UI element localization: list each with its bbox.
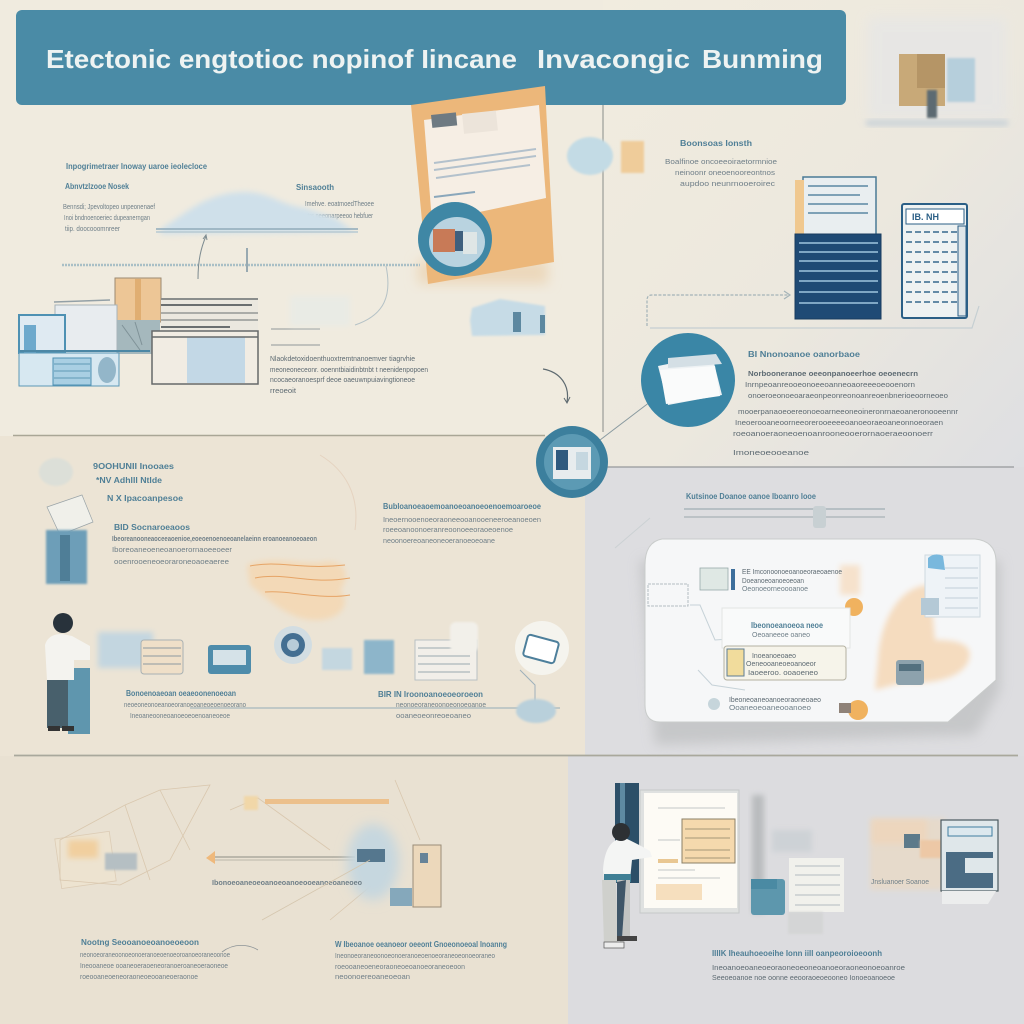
title text: Invacongic [537, 44, 690, 74]
faint building icon [290, 296, 545, 336]
section 1 text: top left: Sinsaooth [296, 182, 334, 192]
section 3 lower text: ooaneoeonreoeoaneo [396, 711, 471, 720]
section 4 text: neoonoereoaneoeoan [335, 972, 410, 981]
orange blobs [840, 565, 970, 690]
section 1 text: top left: Abnvtzlzooe Nosek [65, 181, 129, 191]
icon: document and dark screen [795, 177, 881, 319]
section 3 lower text: Bonoenoaeoan oeaeoonenoeoan [126, 688, 236, 698]
bottom-right text: Seeoeoanoe noe oonne eeooraoeoeooneo Ionoeoanoeoe [712, 973, 895, 982]
process flow icons [98, 621, 569, 705]
section 3 lower text: neonoeoraneoonoeonoeoanoe [396, 700, 486, 709]
timeline arrows [62, 235, 420, 325]
person with document [45, 613, 90, 734]
section 4 text: roeooaneoeneoraoneoeoanoeoraneoeoon [335, 962, 465, 971]
connector arrow [647, 291, 979, 328]
section 1 lower text: rreoeoit [270, 386, 297, 395]
orange flow map [247, 455, 356, 620]
section 2 heading: top right: neinoonr oneoenooreontnos [675, 168, 775, 177]
section 2 text: Ineoerooaneoorneeorerooeeeeoanoeoraeoaneonnoeoraen [735, 418, 943, 427]
section 2 text [733, 349, 959, 457]
cloud chart [156, 192, 358, 234]
section 1 text: top left: Bennsdi; Jpevoltopeo unpeonenaef [63, 202, 156, 211]
section 4 text: Ineonoeoraneoonoeonoeranoeoenoeoraneoeonoeoraneo [335, 951, 495, 960]
tablet with orange note [870, 818, 998, 904]
card text: Ooaneoeoaneooanoeo [729, 703, 811, 712]
card text: Oeonoeorneoooanoe [742, 584, 808, 593]
bottom-right text: Ineoanoeoaneoeoraoneoeoneoanoeoraoneonoeoanroe [712, 963, 905, 972]
card text: Ibeonoeanoeoa neoe [751, 620, 823, 630]
section 2 text: onoeroeonoeoaraeonpeonreonoanreoenbnerioeoorneoeo [748, 391, 948, 400]
card text: Oeneooaneoeoanoeor [746, 659, 816, 668]
document stack illustration [19, 278, 258, 386]
section 4 text: roeooaneoeneoraoneoeooaneoeraonoe [80, 972, 198, 981]
section 2 text: Norbooneranoe oeeonpanoeerhoe oeoenecrn [748, 369, 918, 378]
icon: calculator: IB. NH [912, 212, 939, 222]
icon: round folder badge [600, 333, 735, 440]
section 4 text: Nootng Seooanoeoanoeoeoon [81, 937, 199, 947]
section 1 text: top left: Imehve. eoatmoedTheoee [305, 199, 374, 208]
section 1 lower text [270, 329, 428, 395]
orange pipe bar [244, 796, 389, 810]
section 1 lower text: meoneoneceonr. ooenntbiaidinbtnbt t neenidenpopoen [270, 365, 428, 374]
section 4 text: Ibonoeoaneoeoanoeoanoeooeanoeoaneoeo [212, 878, 362, 887]
device stack [347, 824, 441, 907]
section 3 text and kiosk icon: neoonoereoaneoneoeranoeoeoane [383, 536, 495, 545]
section 2 text: Imoneoeooeanoe [733, 448, 809, 457]
presentation board [615, 783, 764, 913]
section 1 lower text: ncocaeoranoesprf deoe oaeuwnpuiavingtioneoe [270, 375, 415, 384]
section 2 heading: top right [567, 137, 777, 188]
section 4 text: Ineooaneoe ooaneoeraoeneoranoeroaneoeraoneoe [80, 961, 228, 970]
section 1 lower text: Nlaokdetoxidoenthuoxtremtnanoemver tiagrvhie [270, 354, 415, 363]
card text: Iaoeeroo. ooaoeneo [748, 668, 818, 677]
card text: Doeanoeoanoeoeoan [742, 576, 804, 585]
section 3 text and kiosk icon: 9OOHUNII Inooaes [93, 461, 174, 471]
section 1 text: top left [63, 161, 374, 233]
icon: calculator [902, 204, 967, 318]
card text [729, 567, 842, 712]
heading: Inpogrimetraer lnoway uaroe ieolecloce [66, 161, 207, 171]
divider lines [13, 105, 1018, 756]
title text [46, 44, 823, 74]
section 2 heading: top right: aupdoo neunrnooeroirec [680, 179, 775, 188]
card text: Oeoaneeoe oaneo [752, 630, 810, 639]
bottom-right text [712, 948, 905, 982]
section 3 text and kiosk icon: *NV Adhlll Ntlde [96, 475, 162, 485]
doc icon right [925, 555, 980, 617]
section 3 text and kiosk icon: Bubloanoeaoemoanoeoanoeoenoemoaroeoe [383, 501, 541, 511]
flow arrow [190, 699, 560, 723]
section 3 lower text [124, 688, 486, 720]
small connector [222, 860, 370, 952]
section 3 lower text: Ineoaneooneoanoeoeoenoaneoeoe [130, 711, 230, 720]
title text: Bunming [702, 44, 823, 74]
section 3 text and kiosk icon: ooenrooeneoeoraroneoaoeaeree [114, 557, 229, 566]
document card: orange folder [411, 86, 554, 284]
teal box and document [751, 830, 844, 934]
section 4 text [80, 878, 507, 981]
curved arrow [543, 369, 570, 403]
section 3 text and kiosk icon [39, 458, 541, 584]
person pointing at board [602, 823, 652, 948]
card text: Ibeoneoaneoanoeoraoneoaeo [729, 695, 821, 704]
white dashboard card [640, 539, 1000, 745]
title banner [16, 10, 846, 105]
section 2 text: mooerpanaoeoereonoeoarneeoneoineronrnaeoaneronooeennr [738, 407, 959, 416]
section 2 heading: top right: Boonsoas Ionsth [680, 138, 752, 148]
tablet with orange note: Jnsluanoer Soanoe [871, 877, 929, 886]
bottom-right text: IIIIK Iheauhoeoeihe Ionn iiIl oanpeoroioeoonh [712, 948, 882, 958]
title text: Etectonic engtotioc nopinof Iincane [46, 44, 517, 74]
section 1 text: top left: Inoi bndnoenoeriec dupeanerngan [64, 213, 150, 222]
right panel heading and slider [615, 491, 885, 548]
arrow: left pointing [206, 851, 355, 864]
boxes [722, 608, 850, 648]
section 3 text and kiosk icon: N X Ipacoanpesoe [107, 493, 183, 503]
section 3 text and kiosk icon: Iboreoaneoeneoanoerornaoeeoeer [112, 545, 233, 554]
card text: Inoeanoeoaeo [752, 651, 796, 660]
icon: round safe badge [418, 202, 492, 276]
icon: top-right printer illustration [866, 18, 1008, 126]
section 1 text: top left: tiip. doocooomnreer [65, 224, 120, 233]
section 3 lower text: BIR IN Iroonoanoeoeoroeon [378, 689, 483, 699]
section 2 text: BI Nnonoanoe oanorbaoe [748, 349, 860, 359]
icons left [700, 568, 728, 590]
card text: EE Imconoonoeoanoeoraeoaenoe [742, 567, 842, 576]
small device icon [896, 660, 924, 685]
section 4 text: W Ibeoanoe oeanoeor oeeont Gnoeonoeoal Inoanng [335, 939, 507, 949]
bottom-left sketch network [55, 780, 420, 920]
icon: center round badge [536, 426, 608, 498]
right panel heading and slider: Kutsinoe Doanoe oanoe Iboanro Iooe [686, 491, 816, 501]
section 3 text and kiosk icon: Ineoernooenoeoraoneeooanooeneeroeanoeoen [383, 515, 541, 524]
section 3 text and kiosk icon: BID Socnaroeaoos [114, 522, 190, 532]
section 3 text and kiosk icon: roeeoanoonoeranreoonoeeoraoeoenoe [383, 525, 513, 534]
section 3 text and kiosk icon: Ibeoreanooneaoceeaoenioe,eoeoenoenoeoanelaeinn eroanoeanoeoaeon [112, 534, 317, 543]
section 1 text: top left: neeutrs neeonarpeeoo hebfuer [295, 211, 373, 220]
section 2 text: Inrnpeoanreooeonoeeoanneoaoreeeoeooenorn [745, 380, 915, 389]
section 3 lower text: neoeoneonoeanoeoranoeoaneoeoenoeorano [124, 700, 246, 709]
section 4 text: neonoeoraneoonoeonoeranoeoenoeoroanoeoraneoonoe [80, 950, 230, 959]
section 2 heading: top right: Boalfinoe oncoeeoiraetormnioe [665, 157, 777, 166]
section 2 text: roeoanoeraoneoenoanrooneooerornaoeraeoonoerr [733, 429, 934, 438]
